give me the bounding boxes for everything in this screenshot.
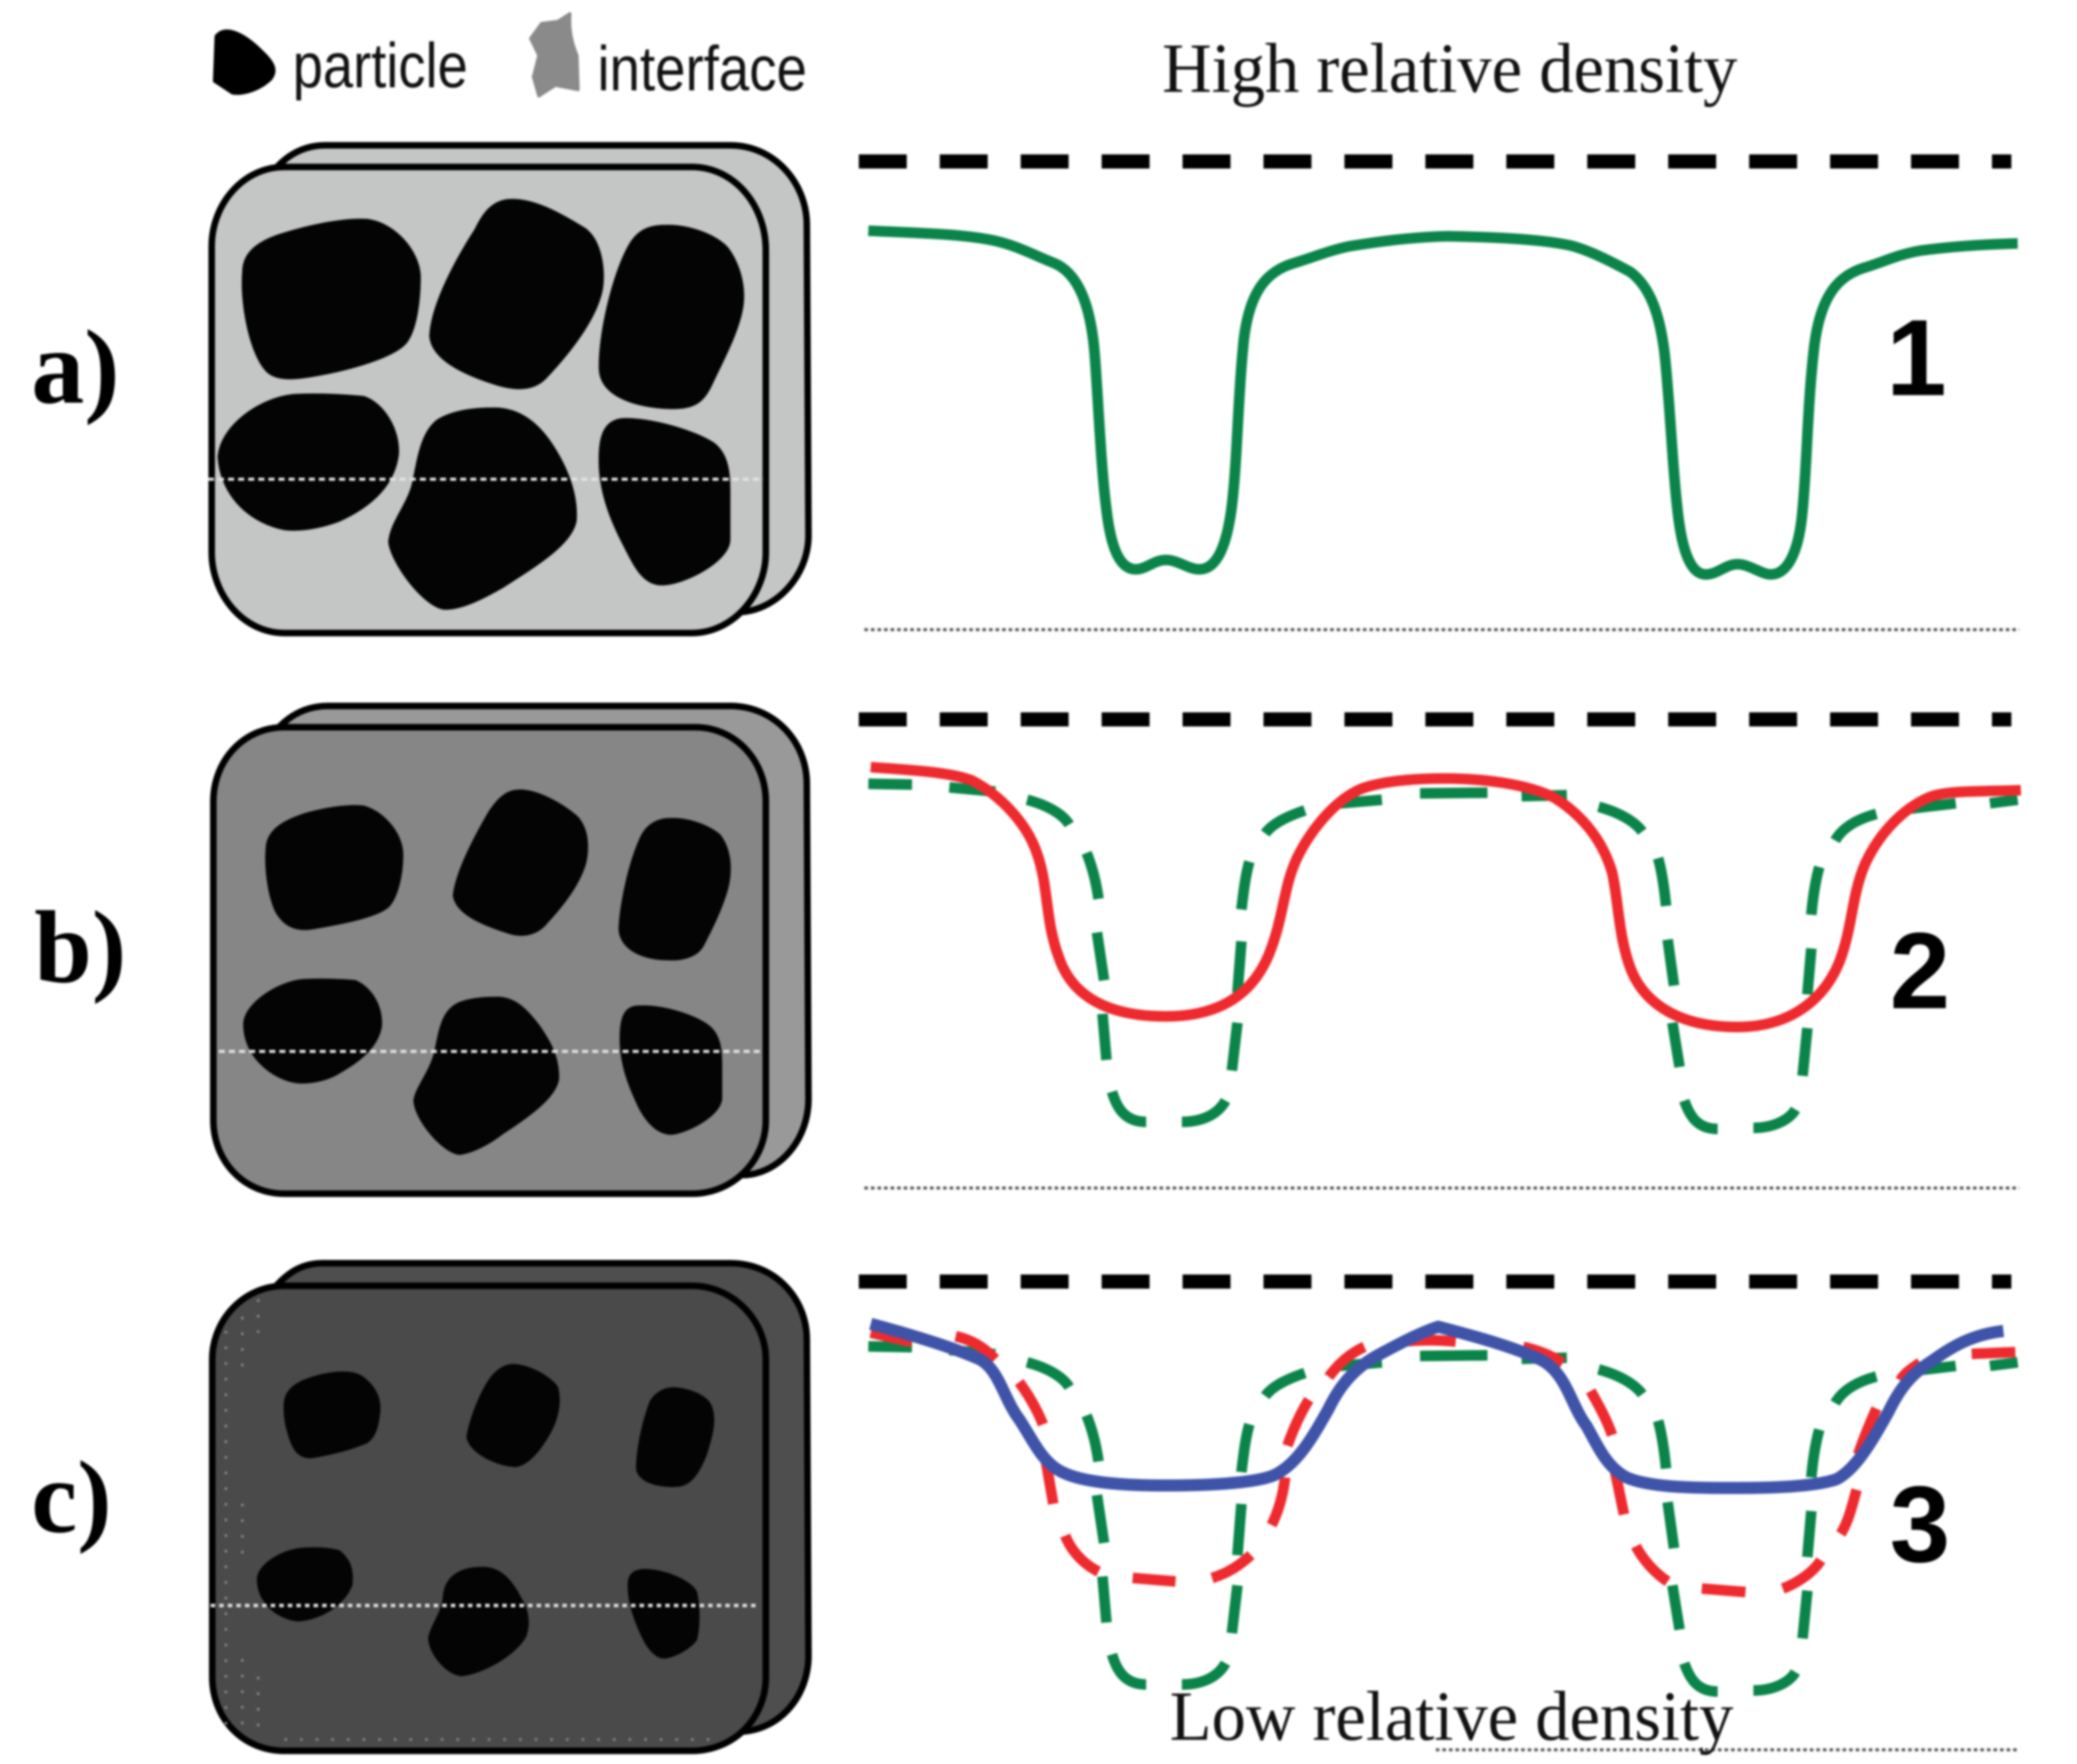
red profile solid: [871, 767, 2021, 1027]
chart a: density profile 1: [859, 161, 2019, 630]
blue profile solid: [871, 1324, 2003, 1488]
back plate a: [276, 145, 808, 612]
upper density limit a: [859, 154, 2011, 169]
front plate a: [212, 167, 766, 633]
green profile dashed c: [868, 1346, 2017, 1691]
panel a: high density particles: [208, 145, 808, 633]
legend label: interface: interface: [597, 34, 807, 104]
particles a: [219, 200, 743, 609]
faint dots c: [226, 1299, 711, 1740]
lower baseline c: [1436, 1748, 2019, 1751]
panel b: medium density particles: [213, 706, 808, 1194]
heading: high relative density: High relative density: [1162, 29, 1737, 107]
number 1: 1: [1886, 297, 1947, 418]
particles c: [258, 1365, 713, 1675]
upper density limit b: [859, 712, 2011, 727]
number 2: 2: [1890, 910, 1950, 1031]
chart b: density profile 2: [859, 720, 2021, 1188]
row label b: b): [34, 890, 126, 1005]
front plate b: [213, 727, 766, 1194]
particles b: [244, 791, 730, 1154]
number 3: 3: [1890, 1463, 1950, 1585]
caption: low relative density: Low relative density: [1170, 1677, 1733, 1755]
row label a: a): [31, 309, 120, 426]
section line a: [208, 478, 763, 481]
lower baseline a: [864, 628, 2019, 631]
row label c: c): [31, 1440, 112, 1555]
upper density limit c: [859, 1275, 2011, 1289]
back plate b: [279, 706, 808, 1175]
icon: particle: [214, 31, 274, 93]
front plate c: [212, 1286, 766, 1751]
panel c: low density particles: [210, 1263, 808, 1751]
icon: interface: [530, 14, 578, 96]
red profile dashed c: [871, 1333, 2015, 1592]
lower baseline b: [864, 1187, 2019, 1190]
section line b: [219, 1050, 763, 1053]
back plate c: [276, 1263, 808, 1731]
section line c: [210, 1604, 757, 1607]
green profile solid: [868, 231, 2017, 574]
legend label: particle: particle: [293, 31, 468, 101]
chart c: density profile 3: [859, 1282, 2019, 1750]
green profile dashed b: [868, 784, 2017, 1129]
legend: [214, 14, 807, 104]
